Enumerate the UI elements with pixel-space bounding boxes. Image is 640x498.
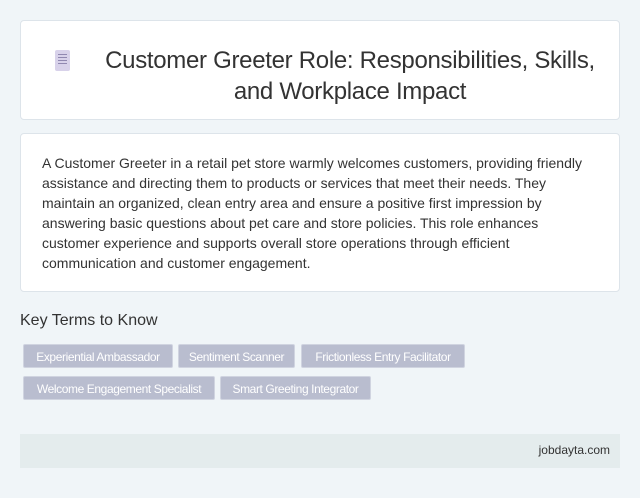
footer xyxy=(20,434,620,468)
tag: Frictionless Entry Facilitator xyxy=(315,350,451,364)
title card xyxy=(20,20,620,120)
tag: Smart Greeting Integrator xyxy=(232,382,359,396)
tag: Welcome Engagement Specialist xyxy=(37,382,201,396)
tag xyxy=(23,376,215,400)
icon: document xyxy=(55,50,70,71)
footer text: jobdayta.com xyxy=(539,443,610,457)
tag xyxy=(23,344,173,368)
description text: A Customer Greeter in a retail pet store warmly welcomes customers, providing friendly assistance and directing them to products or services that meet their needs. They maintain an organized, clean entry area and ensure a positive first impression by answering basic questions about pet care and store policies. This role enhances customer experience and supports overall store operations through efficient communication and customer engagement. xyxy=(42,155,582,271)
tag xyxy=(220,376,371,400)
heading: key terms: Key Terms to Know xyxy=(20,312,158,329)
tag: Sentiment Scanner xyxy=(189,350,284,364)
title: Customer Greeter Role: Responsibilities, Skills, and Workplace Impact xyxy=(105,47,595,105)
tag xyxy=(301,344,465,368)
tag xyxy=(178,344,295,368)
description card xyxy=(20,133,620,292)
tag: Experiential Ambassador xyxy=(36,350,160,364)
